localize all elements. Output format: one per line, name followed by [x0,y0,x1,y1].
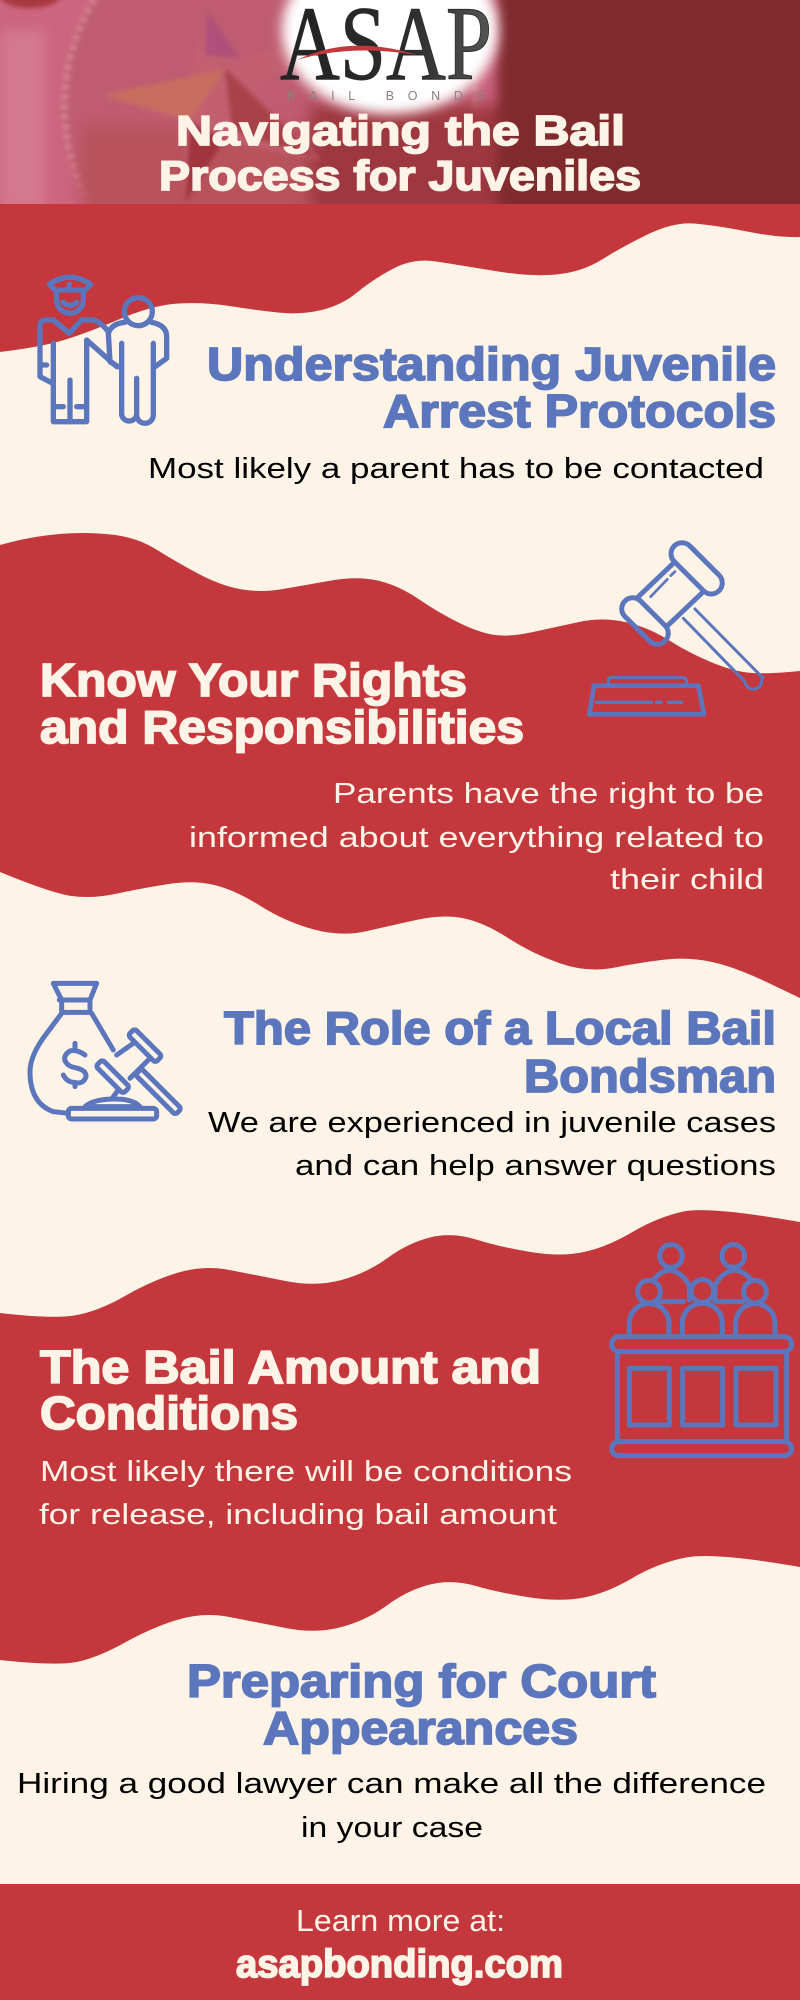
body text [189,778,764,896]
heading: Conditions [40,1387,298,1439]
heading [40,654,524,753]
heading [224,1002,776,1102]
heading: Understanding Juvenile [207,338,776,390]
title [159,107,641,199]
icon: police officer with child [40,277,167,423]
body text: We are experienced in juvenile cases [208,1107,776,1139]
panel: the bail amount and conditions [0,1210,800,1664]
footer band [0,1884,800,2000]
heading [207,338,776,437]
heading: The Role of a Local Bail [224,1002,776,1054]
heading: Appearances [263,1702,578,1754]
body text [208,1107,776,1182]
body text: informed about everything related to [189,822,764,854]
body text [39,1456,572,1531]
title: Navigating the Bail [176,107,625,154]
red wave band [0,1210,800,1664]
red wave band [0,533,800,998]
icon: money bag and gavel [30,983,181,1119]
heading [187,1655,656,1754]
heading [40,1341,541,1439]
heading: Know Your Rights [40,654,467,706]
body text: in your case [301,1812,483,1844]
heading: Bondsman [524,1050,776,1102]
body text: for release, including bail amount [39,1499,557,1531]
heading: Arrest Protocols [383,385,776,437]
heading: Preparing for Court [187,1655,656,1707]
heading: The Bail Amount and [40,1341,541,1393]
body text: Hiring a good lawyer can make all the difference [17,1768,766,1800]
icon: gavel and sound block [589,538,763,714]
panel: know your rights and responsibilities [0,533,800,998]
body text: Parents have the right to be [333,778,764,810]
body text: Most likely there will be conditions [40,1456,572,1488]
panel: the role of a local bail bondsman [30,983,776,1182]
heading: and Responsibilities [40,701,524,753]
red wave top [0,204,800,352]
body text [17,1768,766,1844]
header photo: sheriff badge with star [0,0,800,204]
header banner [0,0,800,204]
body text: Most likely a parent has to be contacted [148,453,764,485]
logo: ASAP Bail Bonds: BAIL BONDS [287,89,485,103]
body text: and can help answer questions [295,1150,776,1182]
footer label: Learn more at: [296,1903,505,1938]
panel: preparing for court appearances [17,1655,766,1844]
footer url: asapbonding.com [236,1943,563,1986]
body text: their child [610,864,764,896]
icon: jury box [612,1245,792,1456]
title: Process for Juveniles [159,152,641,199]
panel: understanding juvenile arrest protocols [0,204,800,485]
